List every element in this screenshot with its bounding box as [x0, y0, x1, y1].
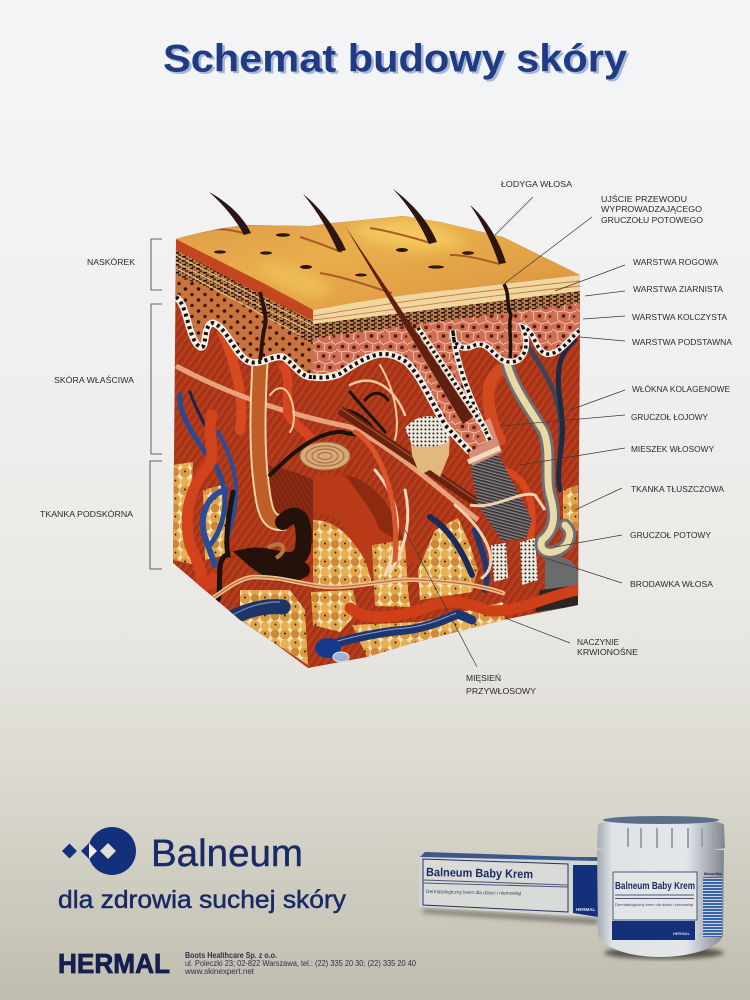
company address: www.skinexpert.net — [184, 967, 255, 976]
dermal papilla — [545, 555, 578, 612]
right face horny streaks — [313, 281, 580, 320]
box description: Dermatologiczny krem dla dzieci i niemowląt — [426, 889, 522, 897]
box end brand: HERMAL — [576, 907, 595, 912]
box top face — [420, 852, 598, 862]
right dermis vessels — [430, 340, 575, 590]
right fat cluster — [418, 518, 478, 600]
bracket: tkanka podskórna — [150, 461, 162, 569]
left labels: NASKÓREK — [87, 257, 135, 267]
top face creases — [205, 228, 500, 293]
jar label stripes — [615, 895, 694, 898]
long nerve fibre — [176, 366, 478, 520]
lower central fat — [311, 590, 358, 632]
jar label description: Dermatologiczny krem dla dzieci i niemowląt — [615, 903, 694, 907]
black vessels mid-dermis — [218, 392, 388, 600]
follicle cuff — [468, 448, 500, 462]
bracket: naskórek — [151, 239, 162, 290]
box stripes — [423, 880, 568, 887]
bottom nerve — [212, 574, 506, 599]
left vein tube — [208, 607, 283, 636]
basal membrane right — [313, 327, 580, 452]
central dark muscle fold — [345, 475, 405, 545]
box end panel — [573, 865, 598, 917]
deep dermis shading — [265, 465, 313, 545]
right labels: TKANKA TŁUSZCZOWA — [631, 484, 724, 494]
vein cut end — [333, 652, 349, 662]
jar lid — [597, 818, 725, 852]
right labels: WARSTWA KOLCZYSTA — [632, 312, 727, 322]
title: Schemat budowy skóry — [163, 38, 627, 80]
right labels: PRZYWŁOSOWY — [466, 686, 536, 696]
right labels: GRUCZOŁ POTOWY — [630, 530, 711, 540]
pale nerves mid-dermis — [270, 365, 408, 575]
bottom-left fat — [240, 590, 308, 665]
top face highlight — [345, 218, 470, 252]
product: cream box — [419, 852, 598, 924]
artery — [350, 590, 578, 617]
left fat column — [173, 462, 193, 564]
skin cross-section illustration — [170, 215, 585, 675]
skin top face — [176, 216, 580, 310]
vein highlight — [337, 612, 456, 642]
right labels: MIESZEK WŁOSOWY — [631, 444, 714, 454]
dermis base — [170, 215, 585, 675]
left labels — [40, 257, 135, 519]
company address: Boots Healthcare Sp. z o.o. — [185, 951, 277, 960]
right labels: NACZYNIE — [577, 637, 619, 647]
left face horny layer — [176, 239, 313, 320]
left face pale streaks — [176, 255, 313, 335]
right labels: BRODAWKA WŁOSA — [630, 579, 713, 589]
right labels: MIĘSIEŃ — [466, 673, 501, 683]
dark papilla root — [535, 585, 578, 612]
leader lines — [405, 197, 625, 667]
company address — [184, 951, 417, 976]
beaded sweat gland right — [520, 538, 538, 585]
slogan: dla zdrowia suchej skóry — [58, 886, 347, 914]
sebaceous gland beaded top — [405, 416, 452, 447]
central fat cluster — [313, 520, 372, 588]
right edge fat — [563, 485, 578, 535]
basal membrane left — [176, 297, 313, 377]
company address: ul. Poleczki 23; 02-822 Warszawa, tel.: (22) 335 20 30; (22) 335 20 40 — [185, 959, 417, 968]
box front — [419, 857, 598, 917]
top face lower highlight — [255, 265, 335, 300]
right labels — [466, 179, 732, 696]
follicle pink root — [468, 418, 502, 466]
sweat gland coil — [250, 516, 304, 574]
right labels: WARSTWA ROGOWA — [633, 257, 718, 267]
lid top — [603, 816, 719, 824]
left inner fat — [203, 484, 226, 560]
right face horny layer — [313, 275, 580, 324]
red hair bulb — [283, 367, 312, 440]
product: cream jar — [597, 816, 725, 959]
sebaceous gland — [410, 436, 450, 477]
top face pores and creases — [214, 233, 474, 276]
right labels: UJŚCIE PRZEWODU — [601, 193, 687, 204]
right labels: GRUCZOŁU POTOWEGO — [601, 215, 703, 225]
bottom vein — [320, 614, 472, 648]
jar side heading: Balneum Baby — [704, 872, 722, 876]
right labels: WŁÓKNA KOLAGENOWE — [632, 384, 730, 394]
central dermis mass — [313, 474, 420, 580]
jar band brand: HERMAL — [673, 931, 691, 936]
box frame — [423, 859, 568, 912]
corpuscle — [300, 442, 350, 470]
left red vessels — [182, 332, 241, 600]
right labels: ŁODYGA WŁOSA — [501, 179, 572, 189]
right labels: GRUCZOŁ ŁOJOWY — [631, 412, 708, 422]
jar side text — [703, 877, 722, 937]
jar body — [597, 850, 724, 957]
jar label name: Balneum Baby Krem — [615, 880, 695, 892]
left labels: SKÓRA WŁAŚCIWA — [54, 374, 134, 385]
left face epidermis cells — [176, 239, 313, 377]
left skin pore duct — [260, 292, 266, 360]
box shadow — [422, 909, 598, 924]
right labels: KRWIONOŚNE — [577, 646, 638, 657]
vein blob end — [315, 638, 341, 658]
hair erector muscle — [340, 410, 480, 505]
title: Schemat budowy skóry — [166, 40, 630, 82]
Balneum logo mark — [62, 827, 136, 875]
right skin pore duct — [504, 284, 511, 358]
right labels: WYPROWADZAJĄCEGO — [601, 204, 702, 214]
left blue veins — [180, 392, 236, 565]
right face epidermis cells — [313, 275, 580, 452]
jar label — [613, 872, 697, 920]
sweat duct — [507, 363, 570, 552]
beaded sweat glands — [491, 543, 508, 582]
jar blue band — [612, 921, 695, 940]
mid fat — [372, 540, 410, 607]
jar shadow — [604, 947, 724, 959]
bracket: skóra właściwa — [151, 304, 162, 454]
left vein highlight — [212, 602, 280, 630]
right labels: WARSTWA ZIARNISTA — [633, 284, 723, 294]
follicle inner bead marks — [418, 328, 486, 430]
left labels: TKANKA PODSKÓRNA — [40, 509, 133, 519]
right face granular layer — [313, 290, 580, 338]
right labels: WARSTWA PODSTAWNA — [632, 337, 732, 347]
pale nerve over follicle — [470, 494, 545, 510]
long hair shaft — [345, 226, 473, 424]
hair follicle ribbed sheath — [470, 452, 532, 541]
box name: Balneum Baby Krem — [426, 865, 533, 881]
bottom fat band — [352, 602, 505, 657]
left face granular layer — [176, 250, 313, 345]
Hermal logo: HERMAL — [58, 948, 170, 979]
follicle inner beads — [418, 328, 486, 430]
lid ribs — [628, 828, 713, 848]
protruding hairs — [209, 189, 506, 264]
left hair root tube — [258, 362, 285, 523]
Balneum wordmark: Balneum — [151, 833, 303, 875]
